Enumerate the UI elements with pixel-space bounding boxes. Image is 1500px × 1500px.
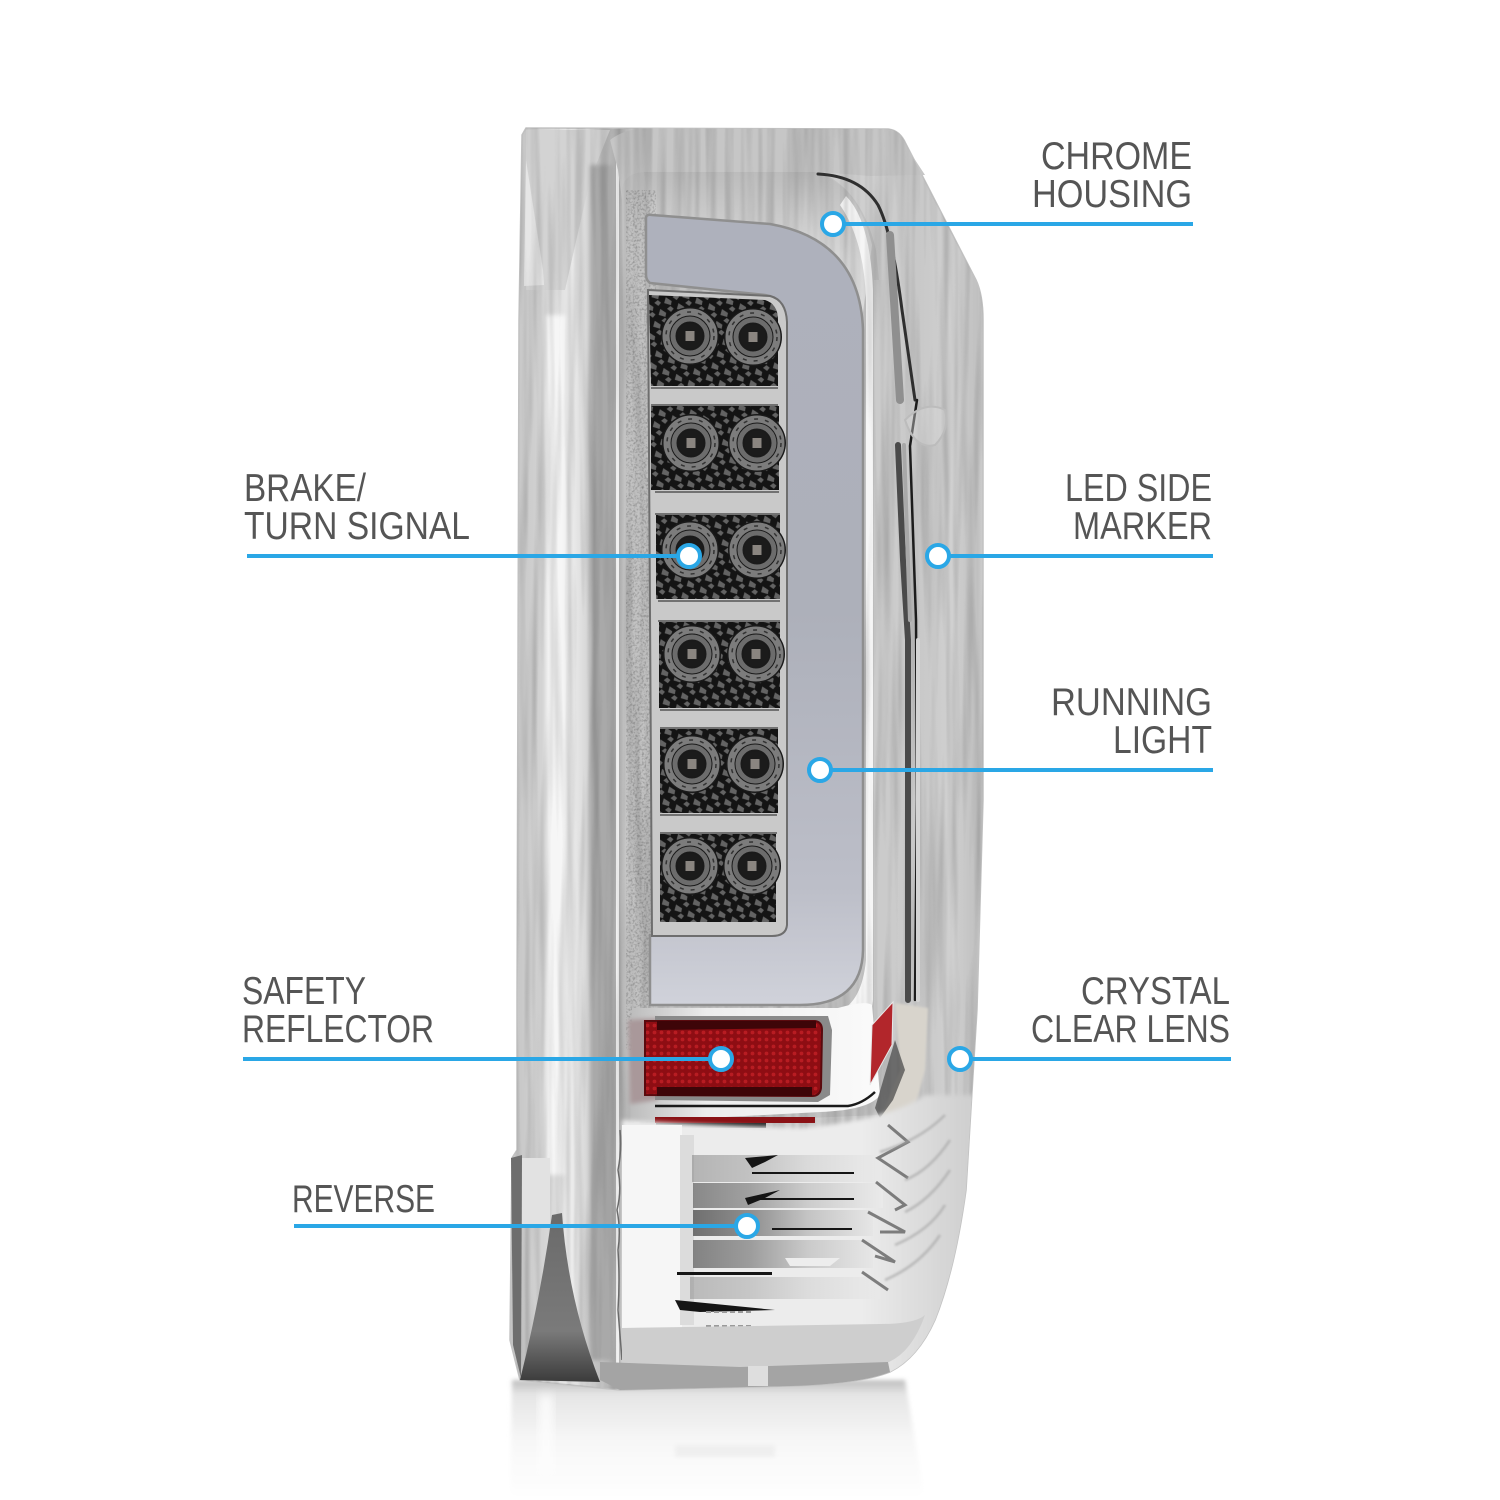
- reflector chrome edge: [655, 1016, 832, 1102]
- callout: reverse: [292, 1178, 758, 1237]
- lower red strip: [655, 1117, 815, 1123]
- flange tab highlight: [522, 1158, 550, 1228]
- chrome side strip: [838, 196, 873, 1040]
- marker dot: [710, 1048, 732, 1070]
- lens left white panel: [622, 1125, 682, 1330]
- label: LED side marker: LED SIDE: [1065, 467, 1212, 510]
- leader line: [833, 222, 1193, 226]
- leader line: [820, 768, 1213, 772]
- label: brake and turn signal: [244, 467, 470, 548]
- leader line: [960, 1057, 1231, 1061]
- marker dot: [809, 759, 831, 781]
- label: brake and turn signal: TURN SIGNAL: [244, 505, 470, 548]
- reflection below lamp: [510, 1380, 925, 1500]
- leader line: [247, 554, 689, 558]
- marker dot: [927, 545, 949, 567]
- separator bar edges: [651, 388, 780, 833]
- safety reflector: [645, 1021, 822, 1096]
- callout: chrome housing: [822, 135, 1193, 235]
- LED row 5: [660, 729, 784, 813]
- callout: safety reflector: [242, 970, 732, 1070]
- tube inner glow: [791, 340, 799, 930]
- lens rib bands: [680, 1135, 883, 1325]
- base bright tab: [748, 1366, 768, 1386]
- callout: LED side marker: [927, 467, 1213, 567]
- label: brake and turn signal: BRAKE/: [244, 467, 366, 510]
- running light tube: [646, 215, 863, 1005]
- left flange details: [524, 130, 619, 1365]
- chrome housing surround: [622, 172, 884, 1125]
- label: LED side marker: [1065, 467, 1212, 548]
- lens lower band: [622, 1315, 925, 1368]
- lower black strip: [656, 1123, 766, 1128]
- label: chrome housing: [1032, 135, 1192, 216]
- marker dot: [736, 1215, 758, 1237]
- housing speckle texture: [626, 190, 656, 1050]
- lens dark lines: [675, 1155, 854, 1312]
- reflector left shadow: [628, 1018, 658, 1104]
- label: chrome housing: HOUSING: [1032, 173, 1192, 216]
- label: running light: RUNNING: [1051, 681, 1212, 724]
- lamp body outline: [510, 128, 983, 1390]
- lower black trim line: [655, 1092, 875, 1106]
- callout: brake and turn signal: [244, 467, 700, 567]
- corner seam detail: [875, 1003, 928, 1120]
- label: running light: [1051, 681, 1212, 762]
- label: crystal clear lens: CRYSTAL: [1081, 970, 1230, 1013]
- LED row 4: [659, 622, 785, 708]
- embossed lens marks: [706, 1312, 752, 1326]
- upper housing light panel: [644, 172, 872, 320]
- marker dot: [949, 1048, 971, 1070]
- lens base dark band: [600, 1362, 890, 1390]
- infographic canvas: [243, 127, 1231, 1458]
- leader line: [938, 554, 1213, 558]
- dark flange foot: [520, 1213, 600, 1382]
- leader line: [243, 1057, 721, 1061]
- lens left seam: [617, 1130, 622, 1360]
- label: running light: LIGHT: [1113, 719, 1212, 762]
- tube right edge glow: [852, 340, 858, 950]
- LED panel: [648, 290, 787, 936]
- label: safety reflector: [242, 970, 434, 1051]
- LED panel frame: [648, 290, 787, 936]
- side marker dark seam: [818, 174, 946, 1000]
- reverse lens: [600, 1095, 990, 1400]
- LED row 2: [651, 406, 786, 490]
- label: LED side marker: MARKER: [1073, 505, 1212, 548]
- tail light product: [510, 128, 990, 1400]
- LED row 3: [656, 515, 786, 599]
- chrome frame around reflector: [632, 1003, 880, 1122]
- leader line: [294, 1224, 747, 1228]
- label: crystal clear lens: CLEAR LENS: [1031, 1008, 1230, 1051]
- inner stripe beyond chrome: [874, 280, 896, 1030]
- label: safety reflector: REFLECTOR: [242, 1008, 434, 1051]
- label: chrome housing: CHROME: [1041, 135, 1192, 178]
- lens outer soft ridges: [880, 1115, 950, 1280]
- callout: crystal clear lens: [949, 970, 1231, 1070]
- LED row 6: [660, 834, 781, 922]
- label: crystal clear lens: [1031, 970, 1230, 1051]
- lens right ripples: [862, 1125, 908, 1290]
- top band of housing: [610, 128, 925, 200]
- LED row 1: [649, 295, 782, 386]
- brushed streak texture: [510, 128, 985, 1390]
- lens base: [622, 1095, 990, 1400]
- label: reverse: REVERSE: [292, 1178, 435, 1221]
- callout: running light: [809, 681, 1213, 781]
- side red reflector: [870, 1002, 893, 1085]
- label: safety reflector: SAFETY: [242, 970, 366, 1013]
- tube body: [646, 215, 863, 1005]
- left lower flange tab: [511, 1155, 522, 1378]
- marker dot: [678, 545, 700, 567]
- marker dot: [822, 213, 844, 235]
